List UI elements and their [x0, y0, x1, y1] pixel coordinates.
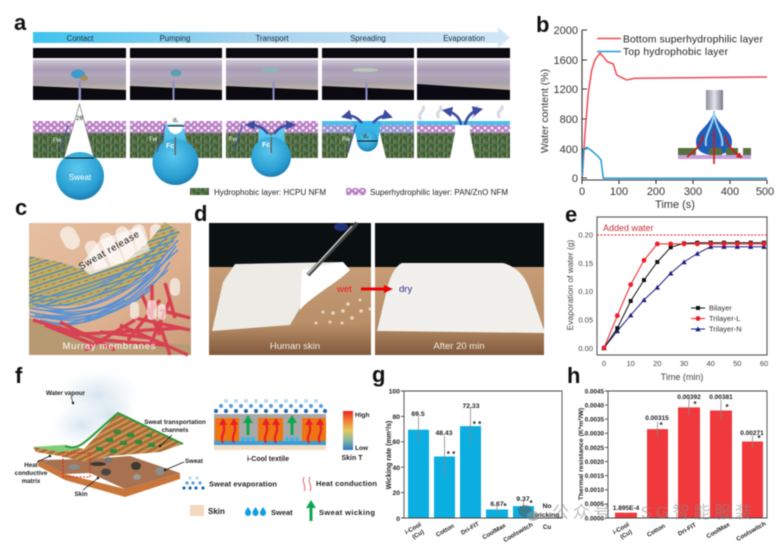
tick labels: 400	[560, 144, 578, 156]
x labels: i-Cool	[612, 521, 631, 536]
chart legend: Trilayer-L	[709, 314, 740, 323]
tick labels: 30	[680, 359, 688, 368]
diagram: spreading: Fw	[342, 137, 351, 143]
y ticks: 0.0005	[585, 501, 604, 508]
line: bottom superhydrophilic layer	[582, 53, 767, 177]
photo: after 20 min: After 20 min	[433, 341, 485, 352]
label h: h	[567, 363, 580, 388]
diagram: spreading	[322, 116, 414, 158]
schematic labels: conductive	[15, 470, 48, 477]
values: 0.00271	[740, 430, 764, 437]
schematic labels: Water vapour	[46, 390, 86, 397]
process arrow with stages: Pumping	[160, 34, 190, 43]
line: top hydrophobic layer	[582, 147, 767, 178]
diagram: spreading: d₂	[363, 134, 370, 140]
diagram: contact: Fw	[53, 138, 62, 144]
legend: layers: Superhydrophilic layer: PAN/ZnO NFM	[370, 188, 508, 197]
skin slab	[38, 456, 180, 497]
x labels	[612, 520, 767, 543]
legend: sweat: Sweat	[271, 508, 293, 517]
diagram: contact: 2θ	[76, 115, 83, 122]
y ticks: 0.0045	[585, 388, 604, 396]
photo: transport	[226, 48, 318, 100]
bars	[615, 407, 763, 518]
tick labels: 1200	[554, 84, 578, 96]
i-Cool textile diagram: i-Cool textile	[247, 456, 289, 463]
tick labels: 200	[647, 186, 665, 198]
values: *	[757, 434, 761, 443]
process arrow with stages: Evaporation	[443, 34, 485, 43]
y ticks: Thermal resistance (K*m²/W)	[578, 408, 585, 500]
diagram: transport: Fc	[262, 142, 270, 149]
process arrow with stages: Contact	[67, 34, 94, 43]
y ticks: 20	[392, 490, 400, 497]
x labels: (Cu)	[411, 529, 425, 541]
process arrow with stages: Spreading	[350, 34, 386, 43]
tick labels: 0.15	[578, 259, 593, 268]
tick labels: 0.05	[578, 316, 593, 324]
wet to dry annotation: wet	[336, 284, 352, 295]
tick labels: 300	[684, 186, 702, 198]
label f: f	[15, 363, 23, 388]
tick labels: 0	[572, 173, 578, 185]
chart legend: Bilayer	[709, 304, 732, 312]
tick labels: 0.00	[578, 344, 593, 353]
y ticks: 0.0040	[585, 402, 604, 410]
diagram: pumping	[130, 118, 222, 185]
panel a: sweat transport process	[14, 10, 510, 200]
y ticks	[386, 388, 400, 523]
x labels: i-Cool	[404, 521, 423, 536]
panel h: thermal resistance bar chart	[567, 363, 767, 543]
values: *	[659, 421, 663, 430]
values: 72.33	[462, 403, 480, 410]
tick labels: 0.10	[578, 287, 593, 296]
tick labels: 60	[760, 359, 768, 368]
values	[613, 394, 764, 512]
tick labels: 40	[707, 359, 715, 368]
schematic labels: channels	[162, 427, 189, 434]
legend: heat conduction	[303, 477, 377, 491]
tick labels: 800	[560, 114, 578, 126]
chart legend	[597, 34, 764, 58]
y ticks: 0.0015	[585, 473, 604, 480]
y ticks: 0.0030	[585, 430, 604, 438]
tick labels: 10	[627, 359, 635, 368]
sweat plumes	[57, 223, 162, 277]
legend: sweat evaporation	[182, 476, 277, 490]
red dashed highlight	[63, 453, 90, 477]
tick labels: 400	[721, 186, 739, 198]
label g: g	[372, 362, 385, 387]
tick labels: Time (min)	[661, 372, 703, 382]
diagram: contact: Sweat	[69, 173, 92, 182]
schematic labels: Skin	[74, 491, 88, 498]
legend: sweat	[245, 507, 293, 517]
y ticks: 0	[396, 516, 400, 523]
diagram: pumping: Fw	[149, 137, 158, 143]
y ticks: 0.0035	[585, 416, 604, 424]
skin lower	[29, 318, 191, 355]
label d: d	[194, 201, 207, 226]
legend: sweat wicking: Sweat wicking	[319, 508, 375, 517]
white plume over mesh	[80, 226, 150, 275]
added water line: Added water	[603, 223, 654, 233]
text: Murray membranes: Murray membranes	[62, 341, 156, 352]
x labels: Dri-FIT	[677, 522, 698, 538]
legend: layers	[190, 188, 508, 197]
tick labels: 50	[733, 359, 741, 368]
tick labels: Time (s)	[655, 199, 695, 211]
chart legend: Bottom superhydrophilic layer	[623, 34, 764, 46]
diagram: contact	[33, 104, 126, 200]
axes	[582, 30, 767, 184]
schematic labels: Heat	[24, 462, 38, 469]
legend: heat conduction: Heat conduction	[316, 479, 377, 488]
error bars	[658, 398, 752, 447]
values: 9.37	[516, 496, 530, 503]
values: *	[503, 502, 507, 511]
schematic labels	[15, 390, 206, 498]
tick labels: 500	[756, 186, 774, 198]
process arrow with stages: Transport	[255, 34, 289, 43]
temperature colour bar	[341, 411, 369, 462]
values: 6.67	[490, 501, 504, 508]
photo: after 20 min	[375, 223, 544, 355]
text: sweat release: Sweat release	[77, 229, 141, 273]
label e: e	[565, 202, 577, 227]
plot frame	[597, 217, 767, 355]
tick labels: 2000	[554, 25, 578, 37]
values: *	[693, 400, 697, 409]
diagram: transport	[226, 121, 318, 177]
y ticks: 0.0000	[585, 516, 604, 522]
red fibres	[33, 283, 190, 355]
panel g: wicking rate bar chart	[372, 362, 562, 544]
legend: sweat wicking	[306, 500, 375, 521]
tick labels	[565, 230, 768, 382]
photo: evaporation	[417, 48, 510, 100]
x labels: Cotton	[646, 523, 667, 539]
y ticks: 0.0010	[585, 487, 604, 494]
axes	[605, 391, 767, 518]
y ticks: 100	[389, 388, 400, 396]
diagram: evaporation	[417, 106, 510, 158]
wet to dry annotation	[336, 284, 412, 295]
y ticks	[578, 388, 604, 522]
textile sheet	[33, 413, 183, 462]
legend: layers: Hydrophobic layer: HCPU NFM	[214, 188, 326, 197]
y ticks: 80	[392, 414, 400, 421]
temperature colour bar: Low	[355, 445, 369, 452]
schematic labels: matrix	[22, 478, 41, 485]
tick labels: 0.20	[578, 230, 593, 240]
chart legend	[691, 304, 742, 334]
values	[411, 403, 559, 519]
label c: c	[15, 195, 27, 220]
values: wicking	[534, 512, 559, 519]
x labels: Coolswitch	[502, 521, 534, 544]
photo: pumping	[130, 48, 222, 100]
error bars	[418, 408, 524, 514]
x labels: Dri-FIT	[460, 521, 481, 537]
chart legend: Trilayer-N	[709, 324, 742, 334]
values: *	[725, 403, 729, 412]
y ticks: 0.0025	[585, 445, 604, 452]
label b: b	[536, 12, 549, 37]
watermark: 公众号 · SG智能服装	[552, 503, 752, 522]
line: Bilayer	[604, 243, 764, 348]
values: 48.43	[435, 430, 453, 437]
legend: skin	[190, 505, 225, 516]
panel f: textile schematic	[15, 363, 377, 521]
x labels: Coolswitch	[735, 520, 767, 543]
bars	[408, 426, 534, 518]
values: 0.00392	[677, 394, 701, 401]
values: * *	[447, 450, 456, 459]
panel b: water content chart	[536, 12, 774, 211]
label a: a	[14, 10, 27, 35]
schematic labels: Sweat transportation	[144, 419, 206, 426]
temperature colour bar: High	[355, 412, 369, 419]
y ticks: 60	[392, 439, 400, 446]
i-Cool textile diagram	[214, 399, 327, 463]
photo: contact	[33, 48, 126, 100]
values: 69.5	[411, 411, 425, 418]
x labels: Cotton	[435, 523, 456, 539]
background	[29, 223, 191, 355]
tick labels: 100	[610, 186, 628, 198]
white droplets on red fibres	[130, 278, 180, 320]
tick labels: Water content (%)	[539, 69, 551, 153]
values: No	[542, 503, 552, 510]
line: Trilayer-N	[604, 247, 764, 348]
process arrow with stages	[33, 27, 510, 48]
water vapour cloud	[52, 369, 140, 447]
photo: spreading	[322, 48, 414, 100]
chart legend: Top hydrophobic layer	[623, 47, 729, 58]
tick labels: 0	[579, 186, 585, 198]
panel e: evaporation chart	[565, 202, 768, 382]
axes	[401, 391, 562, 518]
panel c: Murray membranes illustration	[15, 195, 191, 355]
tick labels: 0	[602, 359, 606, 368]
schematic labels: Sweat	[185, 458, 203, 465]
woven mesh	[29, 222, 180, 308]
photo: human skin: Human skin	[270, 341, 320, 352]
x labels: (Cu)	[619, 529, 633, 541]
y ticks: 0.0020	[585, 459, 604, 466]
tick labels: Evaporation of water (g)	[565, 239, 575, 330]
values: 1.895E-4	[613, 505, 640, 512]
photo: human skin	[209, 223, 372, 355]
tick labels	[539, 25, 774, 211]
values: 0.00381	[709, 394, 733, 401]
panel d: wet to dry photos	[194, 201, 544, 355]
legend: skin: Skin	[208, 507, 225, 516]
x labels: Cu	[543, 524, 551, 531]
x labels: CoolMax	[481, 522, 508, 541]
values: *	[529, 499, 533, 508]
tick labels: 1600	[554, 55, 578, 67]
diagram: transport: Fw	[229, 137, 238, 143]
blue fibres	[30, 230, 178, 325]
y ticks: Wicking rate (mm²/s)	[386, 421, 393, 489]
diagram: pumping: Fc	[166, 143, 174, 150]
diagram: pumping: d₁	[173, 118, 178, 124]
line: Trilayer-L	[604, 244, 764, 348]
inset: droplet on membrane	[678, 90, 751, 164]
tick labels: 20	[653, 359, 661, 368]
temperature colour bar: Skin T	[341, 455, 363, 462]
legend: sweat evaporation: Sweat evaporation	[209, 480, 277, 488]
y ticks: 40	[392, 465, 400, 472]
values: 0.00315	[645, 415, 669, 422]
values: * *	[473, 420, 482, 429]
x labels: CoolMax	[705, 521, 732, 540]
wet to dry annotation: dry	[399, 284, 412, 295]
x labels	[404, 521, 551, 544]
